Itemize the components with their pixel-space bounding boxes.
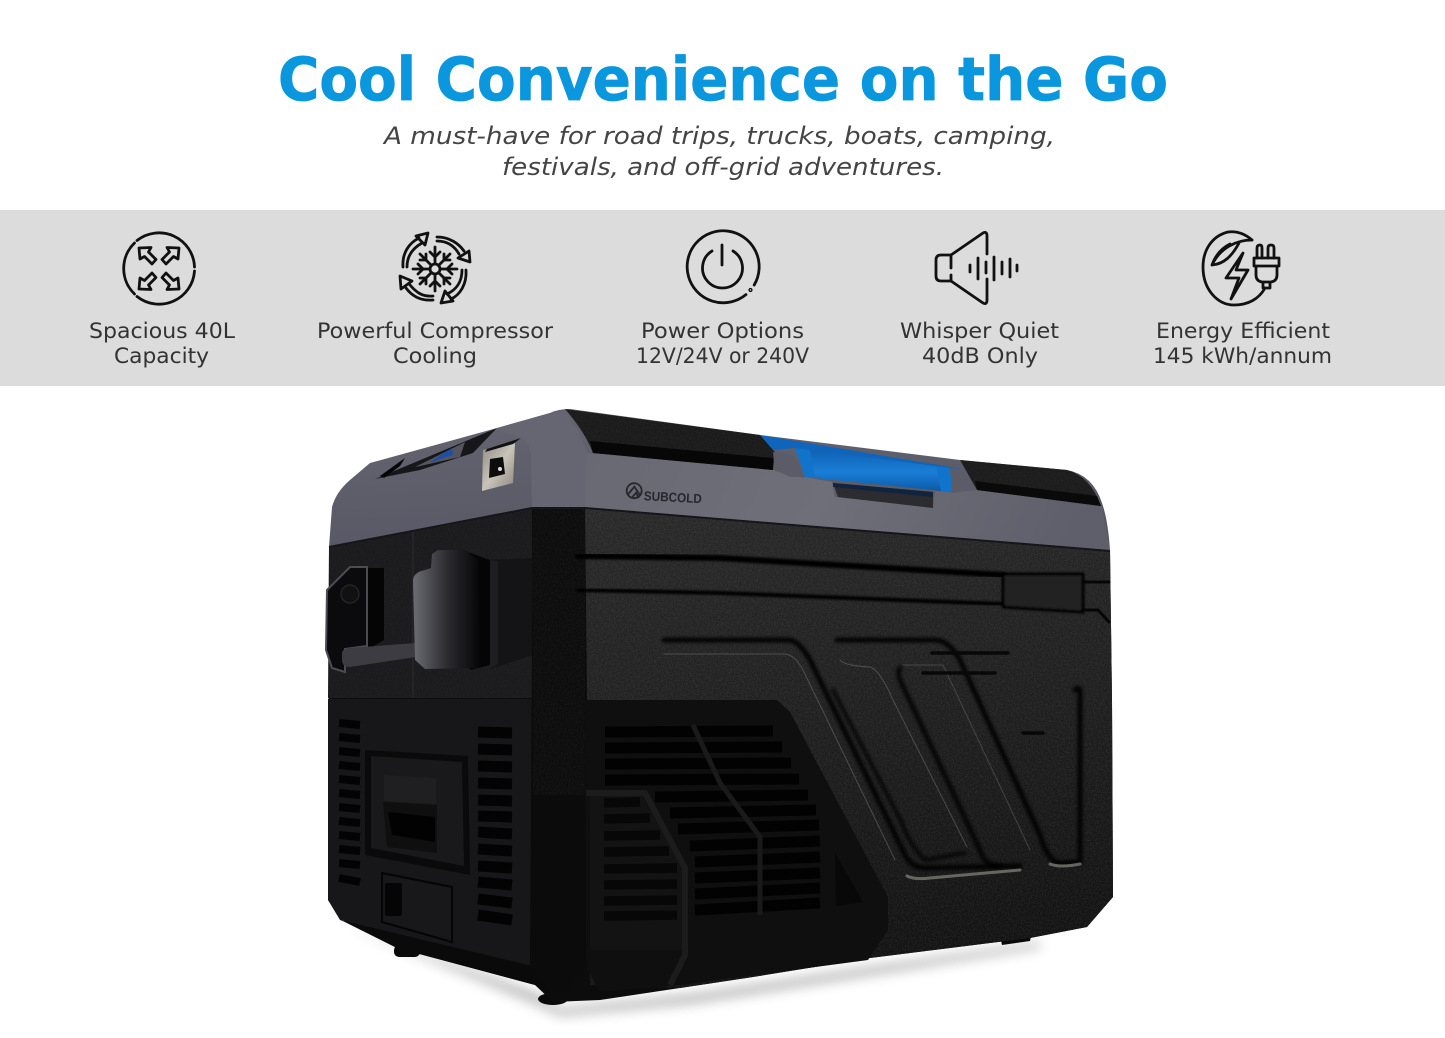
feature: capacity [89, 233, 235, 368]
blue latch handle [760, 435, 963, 492]
cooler body silhouette [328, 508, 1113, 1002]
power socket [482, 438, 521, 491]
icon: expand arrows [124, 233, 194, 304]
product: portable compressor cooler [326, 409, 1113, 1016]
title: Cool Convenience on the Go [278, 45, 1168, 115]
label: power [636, 319, 810, 368]
label: quiet [900, 319, 1059, 368]
subtitle: festivals, and off-grid adventures. [502, 153, 944, 181]
lid black right top panel [960, 460, 1101, 506]
label: capacity: Spacious 40L [89, 319, 235, 343]
left lower side face [328, 699, 533, 966]
vent struts [693, 725, 760, 915]
feet [394, 932, 1032, 1005]
label: cooling: Cooling [393, 344, 477, 368]
label: cooling: Powerful Compressor [317, 319, 553, 343]
handle recess shadow [367, 551, 490, 670]
left upper side face [328, 509, 533, 698]
vent panel on front [585, 700, 888, 992]
logo mark [626, 483, 642, 499]
feature: quiet [900, 232, 1059, 368]
lid front grey strip [585, 453, 1110, 550]
icon: leaf, bolt and plug [1203, 232, 1279, 305]
label: power: 12V/24V or 240V [636, 344, 810, 368]
front textured face [578, 508, 1113, 988]
panel: features band [0, 210, 1445, 386]
handle right cap [413, 550, 480, 669]
lid corner highlight [497, 413, 587, 508]
left side vents [339, 723, 512, 920]
front emboss pattern [664, 640, 1080, 879]
handle left bracket [326, 567, 367, 672]
label: energy [1153, 319, 1332, 368]
label: cooling [317, 319, 553, 368]
lid seam [329, 508, 1110, 551]
moulding dashes [923, 653, 1043, 733]
label: quiet: 40dB Only [922, 344, 1038, 368]
lower left vent block [586, 793, 685, 985]
feature: energy [1153, 232, 1332, 368]
label: quiet: Whisper Quiet [900, 319, 1059, 343]
label: capacity: Capacity [114, 344, 209, 368]
control panel with display [375, 428, 497, 479]
label: capacity [89, 319, 235, 368]
feature: power [636, 231, 810, 368]
label: energy: Energy Efficient [1156, 319, 1330, 343]
logo wordmark: SUBCOLD [644, 488, 702, 506]
feature: cooling [317, 233, 553, 368]
lower side chamfer [340, 920, 552, 995]
icon: power button [687, 231, 759, 303]
handle recess [833, 483, 933, 508]
front ridge grooves [578, 556, 1109, 622]
handle shadow under latch [833, 483, 933, 497]
upper vent slats [605, 731, 820, 910]
handle bar [342, 643, 416, 667]
label: energy: 145 kWh/annum [1153, 344, 1332, 368]
subtitle [382, 122, 1055, 181]
ground shadow [345, 925, 1040, 1016]
hinge areas [773, 452, 977, 493]
lid backing plate [329, 409, 1110, 550]
icon: snowflake with cycle arrows [400, 233, 470, 303]
bracket screw [341, 585, 359, 603]
vent triangle [835, 853, 863, 906]
corner band [530, 508, 586, 998]
side access door [365, 750, 470, 942]
label: power: Power Options [641, 319, 804, 343]
lid black left top panel [565, 409, 775, 470]
side carry handle [326, 550, 490, 672]
brand logo [626, 483, 702, 506]
icon: speaker with sound wave [936, 232, 1017, 304]
subtitle: A must-have for road trips, trucks, boats, camping, [382, 122, 1055, 150]
